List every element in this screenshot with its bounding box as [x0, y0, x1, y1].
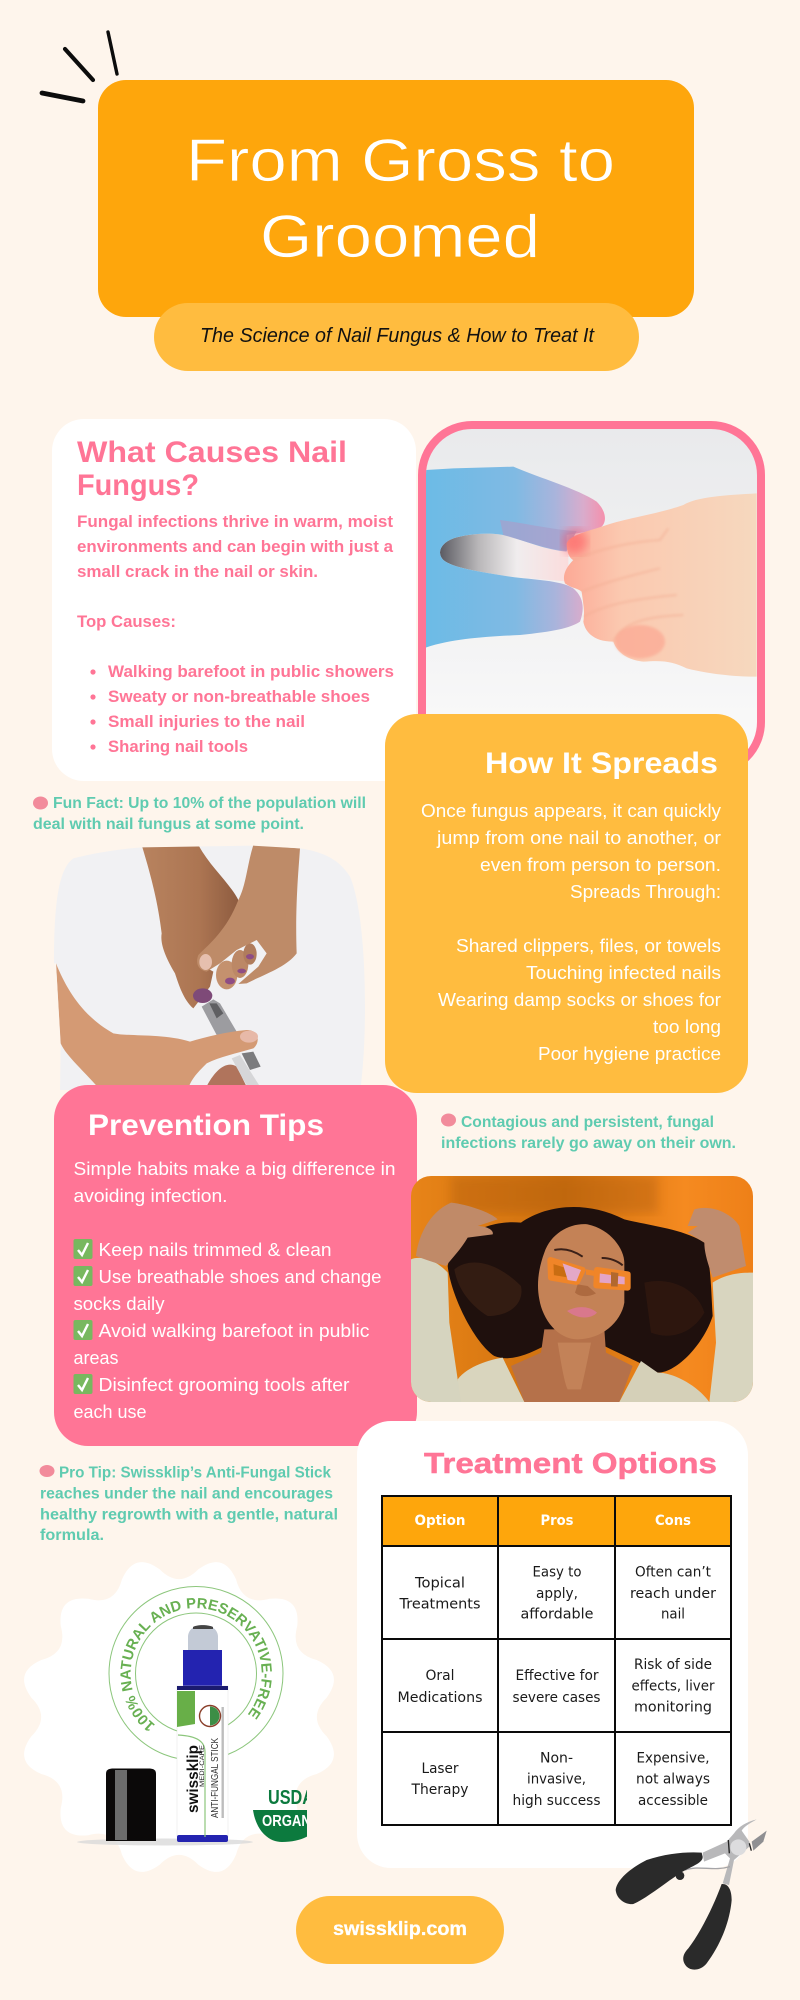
table row: topical: reach under — [630, 1586, 716, 1602]
intro text: causes: environments and can begin with just a — [77, 537, 394, 556]
table row: topical: apply, — [536, 1586, 578, 1602]
title: Groomed — [260, 203, 540, 270]
panel: prevention tips — [54, 1085, 417, 1446]
table row: oral: severe cases — [512, 1690, 600, 1706]
checklist: prevention tips: Avoid walking barefoot in public — [98, 1320, 370, 1341]
list: top causes — [90, 662, 394, 756]
heading: prevention: Prevention Tips — [88, 1109, 324, 1142]
panel: what causes nail fungus — [52, 419, 416, 781]
checklist: prevention tips: areas — [74, 1347, 118, 1368]
table header — [414, 1513, 691, 1529]
title: From Gross to — [186, 127, 615, 194]
table row: topical: affordable — [520, 1606, 594, 1622]
ring: natural seal: 100% NATURAL AND PRESERVATIVE-FREE — [120, 1598, 272, 1731]
table row: oral: Risk of side — [634, 1657, 712, 1673]
checklist: prevention tips — [74, 1239, 382, 1422]
table row: topical: nail — [661, 1606, 685, 1622]
badge: USDA organic — [253, 1790, 307, 1842]
checklist: prevention tips: Keep nails trimmed & clean — [98, 1239, 332, 1260]
heading: causes — [77, 436, 347, 502]
callout: pro tip: Pro Tip: Swissklip’s Anti-Fungal Stick — [59, 1464, 331, 1482]
photo: woman with orange glasses — [411, 1176, 753, 1402]
table row: topical: Easy to — [532, 1564, 582, 1580]
panel: how it spreads — [385, 714, 748, 1093]
bottle — [177, 1625, 228, 1842]
heading: causes: Fungus? — [77, 469, 199, 502]
table header: Option — [414, 1513, 466, 1529]
table row: oral: Oral — [426, 1668, 454, 1684]
checklist: prevention tips: each use — [74, 1401, 146, 1422]
link pill: swissklip.com: swissklip.com — [333, 1919, 467, 1940]
table row: topical: Often can’t — [635, 1564, 711, 1580]
table row: topical: Treatments — [399, 1596, 480, 1612]
intro text: causes: small crack in the nail or skin. — [77, 562, 318, 581]
body text: spreads: even from person to person. — [480, 854, 721, 875]
callout: fun fact: deal with nail fungus at some point. — [33, 816, 304, 833]
table row: oral: monitoring — [634, 1700, 712, 1716]
subtitle pill: The Science of Nail Fungus & How to Treat It — [200, 325, 595, 347]
table row: oral: Medications — [398, 1690, 482, 1706]
photo: gloved hand holding toes, pink frame — [422, 425, 761, 772]
intro text: prevention: Simple habits make a big difference in — [74, 1158, 395, 1179]
panel: treatment options — [357, 1421, 748, 1868]
body text: spreads: jump from one nail to another, or — [436, 827, 721, 848]
callout: pro tip: formula. — [40, 1527, 104, 1544]
table: treatment comparison — [381, 1495, 732, 1825]
link pill: swissklip.com — [296, 1896, 504, 1964]
intro text: causes: Fungal infections thrive in warm, moist — [77, 512, 393, 531]
callout: fun fact — [33, 795, 366, 833]
header panel — [98, 80, 694, 317]
icon: cuticle nippers — [616, 1819, 767, 1970]
heading: treatment: Treatment Options — [424, 1448, 717, 1480]
product: anti-fungal stick on scalloped badge — [24, 1562, 334, 1872]
table row: laser: invasive, — [527, 1772, 586, 1788]
callout: contagious: infections rarely go away on their own. — [441, 1135, 736, 1152]
bottle: MEDI-CARE — [199, 1744, 206, 1787]
table row: laser: accessible — [638, 1793, 708, 1809]
body text: spreads: too long — [653, 1016, 721, 1037]
intro text: prevention — [74, 1158, 395, 1206]
subtitle pill — [154, 303, 639, 371]
table row: laser: Non- — [540, 1750, 573, 1766]
icon: spark strokes — [42, 32, 117, 101]
callout: pro tip: healthy regrowth with a gentle, natural — [40, 1506, 338, 1524]
heading: causes: What Causes Nail — [77, 436, 347, 469]
body text: spreads: Touching infected nails — [526, 962, 721, 983]
callout: pro tip — [40, 1464, 338, 1544]
table row: oral — [398, 1657, 715, 1716]
intro text: prevention: avoiding infection. — [74, 1185, 228, 1206]
checklist: prevention tips: Use breathable shoes and change — [98, 1266, 382, 1287]
list: top causes: Walking barefoot in public showers — [108, 662, 394, 681]
bottle: ANTI-FUNGAL STICK — [210, 1738, 221, 1818]
table header: Pros — [540, 1513, 574, 1529]
body text: spreads — [421, 800, 722, 1064]
body text: spreads: Wearing damp socks or shoes for — [438, 989, 721, 1010]
title — [186, 127, 615, 270]
heading: spreads: How It Spreads — [485, 747, 718, 780]
callout: pro tip: reaches under the nail and encourages — [40, 1486, 333, 1502]
table row: laser: high success — [512, 1793, 600, 1809]
table row: oral: Effective for — [516, 1668, 599, 1684]
body text: spreads: Once fungus appears, it can quickly — [421, 800, 722, 821]
intro text: causes — [77, 512, 394, 631]
table row: topical — [399, 1564, 716, 1622]
table row: laser — [411, 1750, 710, 1809]
list: top causes: Sharing nail tools — [108, 737, 248, 756]
table row: laser: Therapy — [411, 1782, 469, 1798]
table row: laser: Expensive, — [636, 1750, 710, 1766]
body text: spreads: Shared clippers, files, or towels — [456, 935, 721, 956]
badge: USDA organic: USDA — [268, 1787, 314, 1809]
body text: spreads: Poor hygiene practice — [538, 1043, 721, 1064]
bottle: swissklip — [185, 1745, 202, 1813]
intro text: causes: Top Causes: — [77, 612, 176, 631]
table row: topical: Topical — [414, 1576, 465, 1592]
list: top causes: Sweaty or non-breathable shoes — [108, 687, 370, 706]
table header: Cons — [655, 1513, 691, 1529]
list: top causes: Small injuries to the nail — [108, 712, 305, 731]
table row: oral: effects, liver — [632, 1678, 715, 1694]
checklist: prevention tips: Disinfect grooming tools after — [98, 1374, 350, 1395]
bottle cap — [106, 1768, 156, 1841]
body text: spreads: Spreads Through: — [570, 881, 721, 902]
callout: contagious — [441, 1114, 736, 1152]
table row: laser: not always — [636, 1772, 710, 1788]
callout: fun fact: Fun Fact: Up to 10% of the population will — [53, 795, 366, 812]
photo: feet with nail clipper — [50, 840, 370, 1093]
checklist: prevention tips: socks daily — [74, 1293, 165, 1314]
callout: contagious: Contagious and persistent, fungal — [461, 1114, 714, 1131]
badge: USDA organic: ORGANIC — [262, 1813, 324, 1830]
table row: laser: Laser — [422, 1761, 459, 1777]
